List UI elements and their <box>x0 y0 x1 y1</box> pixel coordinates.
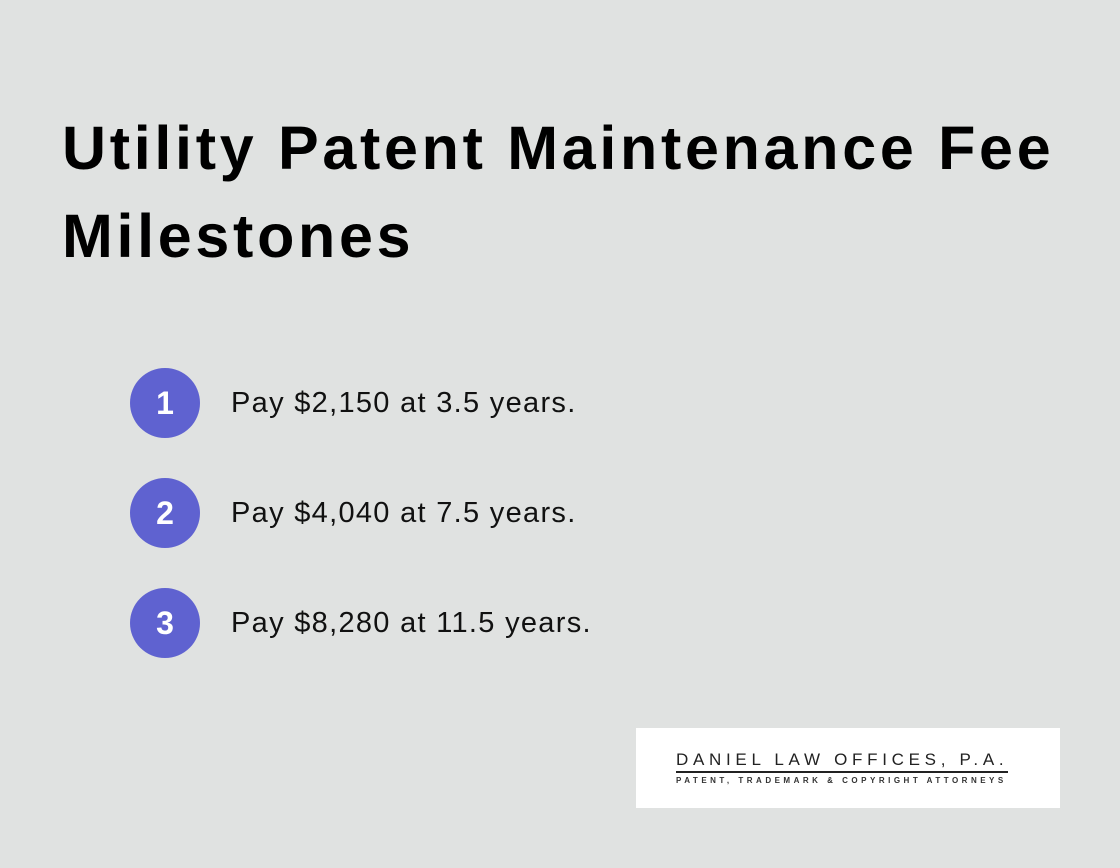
title: Utility Patent Maintenance Fee <box>62 114 1054 182</box>
icon: number 2 <box>130 478 200 548</box>
logo <box>636 728 1060 808</box>
title: Milestones <box>62 202 414 270</box>
icon: number 2: 2 <box>156 495 174 531</box>
text 2: Pay $4,040 at 7.5 years. <box>231 497 577 529</box>
icon: number 3 <box>130 588 200 658</box>
text 1: Pay $2,150 at 3.5 years. <box>231 387 577 419</box>
logo tagline: PATENT, TRADEMARK & COPYRIGHT ATTORNEYS <box>676 776 1007 785</box>
title <box>62 114 1054 270</box>
item 2 <box>130 478 577 548</box>
logo name: DANIEL LAW OFFICES, P.A. <box>676 750 1008 769</box>
icon: number 3: 3 <box>156 605 174 641</box>
text 3: Pay $8,280 at 11.5 years. <box>231 607 592 639</box>
icon: number 1 <box>130 368 200 438</box>
icon: number 1: 1 <box>156 385 174 421</box>
item 3 <box>130 588 592 658</box>
item 1 <box>130 368 577 438</box>
